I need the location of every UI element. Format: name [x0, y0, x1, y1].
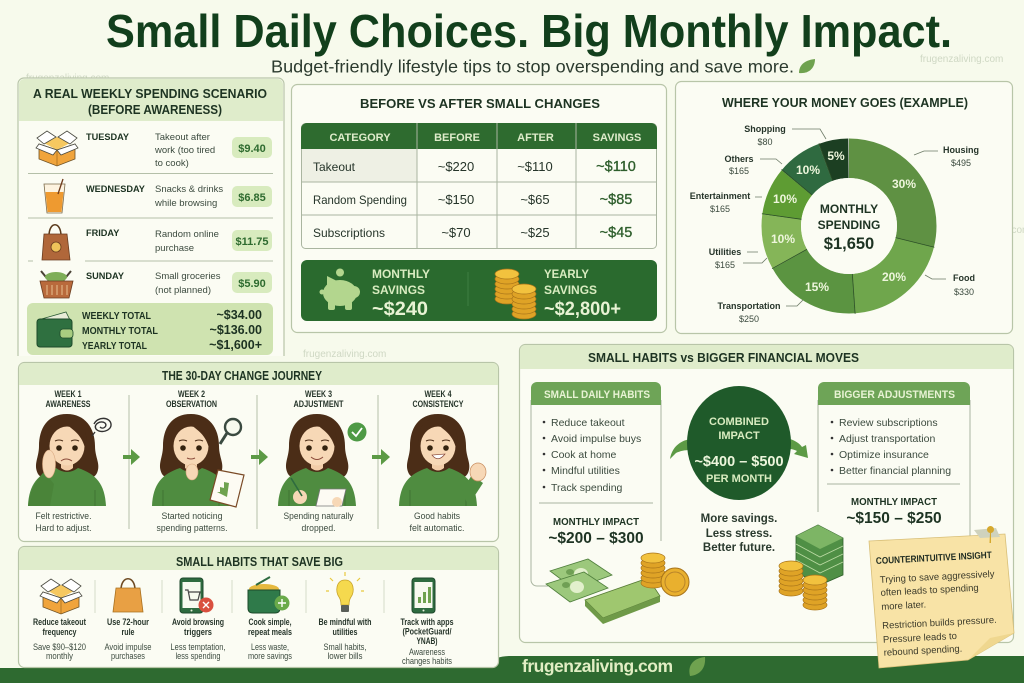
totals box: ~$136.00: [210, 323, 262, 337]
panel: where your money goes: [676, 82, 1012, 334]
card: small daily habits: MONTHLY IMPACT: [553, 517, 639, 528]
sticky note: counterintuitive insight: Trying to save aggressively: [880, 569, 995, 586]
row: Wednesday: Snacks & drinks: [155, 184, 223, 195]
row: Friday: purchase: [155, 243, 194, 254]
combined impact circle: ~$400 – $500: [694, 454, 784, 470]
savings banner: [301, 260, 657, 321]
habit: cook simple: Cook simple,: [248, 617, 292, 627]
habit: avoid browsing: less spending: [176, 651, 220, 661]
comparison table: ~$150: [438, 192, 474, 207]
habit: track with apps: changes habits: [402, 656, 452, 666]
sticky note: counterintuitive insight: more later.: [881, 599, 926, 613]
totals box: ~$1,600+: [209, 338, 262, 352]
chart labels: Shopping: [744, 124, 786, 134]
comparison table: ~$220: [438, 159, 474, 174]
habit: avoid browsing: Less temptation,: [170, 642, 226, 652]
illustration: cash and coins left: [546, 553, 689, 624]
habit: 72-hour rule: Avoid impulse: [104, 642, 152, 652]
watermarks: frugenzaliving.com: [303, 349, 386, 360]
comparison table: [301, 123, 657, 248]
sticky note: counterintuitive insight: [869, 526, 1014, 668]
row: Tuesday: [36, 131, 272, 169]
tagline: [701, 513, 777, 554]
card: small daily habits: Reduce takeout: [551, 417, 625, 429]
chart labels: $330: [954, 287, 974, 297]
sticky note: counterintuitive insight: COUNTERINTUITIVE INSIGHT: [876, 550, 992, 567]
panel: weekly spending scenario: [18, 78, 284, 356]
totals box: [27, 303, 273, 355]
habit: utilities: utilities: [332, 627, 358, 637]
week 1: [28, 389, 111, 533]
comparison table: ~$45: [600, 225, 632, 241]
donut chart: 30%: [892, 177, 916, 191]
week 4: CONSISTENCY: [412, 399, 464, 409]
chart labels: Housing: [943, 145, 979, 155]
footer site name: frugenzaliving.com: [522, 656, 673, 676]
sticky note: counterintuitive insight: Pressure leads to: [883, 631, 957, 646]
card: bigger adjustments: BIGGER ADJUSTMENTS: [834, 389, 955, 401]
combined impact circle: IMPACT: [718, 430, 760, 442]
habit: 72-hour rule: Use 72-hour: [107, 617, 149, 627]
row: Sunday: SUNDAY: [86, 271, 124, 281]
week 4: felt automatic.: [410, 523, 464, 533]
icon: green check: [348, 422, 366, 442]
panel heading: SMALL HABITS THAT SAVE BIG: [176, 554, 343, 569]
week 2: OBSERVATION: [166, 399, 217, 409]
comparison table: Takeout: [313, 160, 356, 174]
habit: cook simple: repeat meals: [248, 627, 292, 637]
week 4: Good habits: [414, 511, 460, 521]
habit: avoid browsing: triggers: [184, 627, 212, 637]
habit: track with apps: YNAB): [416, 636, 438, 646]
row: Friday: [42, 225, 272, 260]
footer bar: [0, 656, 1024, 683]
comparison table: ~$25: [520, 225, 550, 240]
panel heading: (BEFORE AWARENESS): [88, 102, 222, 117]
comparison table: SAVINGS: [593, 132, 641, 144]
row: Tuesday: work (too tired: [154, 145, 215, 156]
habit: utilities: lower bills: [328, 651, 363, 661]
donut centre label: MONTHLY: [820, 202, 878, 216]
tagline: Less stress.: [706, 528, 772, 540]
panel heading: [33, 86, 267, 117]
totals box: YEARLY TOTAL: [82, 341, 147, 352]
panel: small habits that save big: [18, 546, 498, 668]
comparison table: AFTER: [517, 132, 554, 144]
week 2: spending patterns.: [156, 523, 228, 533]
combined impact circle: PER MONTH: [706, 473, 772, 485]
card: bigger adjustments: [818, 382, 970, 545]
icon: pin: [987, 526, 994, 543]
arrows: [670, 439, 808, 459]
donut centre label: [818, 202, 880, 253]
habit: utilities: Small habits,: [324, 642, 366, 652]
icon: clipboard chart: [210, 470, 244, 507]
donut chart: 10%: [771, 232, 795, 246]
week 2: Started noticing: [162, 511, 222, 521]
habit: reduce takeout: Save $90–$120: [33, 642, 86, 652]
week 3: ADJUSTMENT: [294, 399, 344, 409]
combined impact circle: [670, 386, 808, 500]
row: Sunday: (not planned): [155, 285, 211, 296]
icon: gold coins: [495, 269, 536, 319]
subtitle: Budget-friendly lifestyle tips to stop overspending and save more.: [271, 56, 794, 76]
row: Friday: Random online: [155, 229, 219, 240]
donut chart: [762, 143, 934, 314]
chart labels: $250: [739, 314, 759, 324]
panel heading: THE 30-DAY CHANGE JOURNEY: [162, 369, 323, 383]
combined impact circle: COMBINED: [709, 416, 769, 428]
chart labels: $165: [710, 204, 730, 214]
chart labels: Others: [724, 154, 754, 164]
row: Tuesday: TUESDAY: [86, 132, 129, 142]
donut centre label: $1,650: [824, 235, 874, 253]
comparison table: ~$110: [517, 159, 553, 174]
habit: reduce takeout: frequency: [42, 627, 76, 637]
habit: track with apps: (PocketGuard/: [402, 626, 452, 636]
week 3: [278, 389, 366, 533]
habit: cook simple: [248, 577, 292, 661]
donut chart: 10%: [773, 192, 797, 206]
comparison table: ~$110: [596, 159, 636, 175]
row: Tuesday: to cook): [155, 158, 189, 169]
week 3: dropped.: [302, 523, 336, 533]
habit: reduce takeout: monthly: [46, 651, 73, 661]
row: Wednesday: while browsing: [154, 198, 217, 209]
savings banner: ~$2,800+: [544, 299, 621, 320]
card: small daily habits: Avoid impulse buys: [551, 433, 641, 445]
totals box: WEEKLY TOTAL: [82, 311, 151, 322]
week 3: Spending naturally: [284, 511, 354, 521]
panel heading: SMALL HABITS vs BIGGER FINANCIAL MOVES: [588, 350, 859, 365]
row: Sunday: [40, 271, 272, 298]
habit: 72-hour rule: [104, 579, 152, 661]
card: small daily habits: [531, 382, 661, 586]
week 1: WEEK 1: [54, 389, 82, 399]
habit: utilities: [318, 572, 372, 661]
week 1: Felt restrictive.: [36, 511, 92, 521]
icon: subtitle leaf: [799, 59, 815, 73]
savings banner: MONTHLY: [372, 267, 430, 281]
watermarks: frugenzaliving.com: [312, 85, 395, 96]
card: small daily habits: ~$200 – $300: [548, 530, 644, 547]
habit: track with apps: [400, 578, 454, 666]
habit: reduce takeout: Reduce takeout: [33, 617, 86, 627]
habit: avoid browsing: Avoid browsing: [172, 617, 224, 627]
week 4: WEEK 4: [424, 389, 452, 399]
habit: utilities: Be mindful with: [318, 617, 372, 627]
week 4: [399, 389, 486, 533]
row: Friday: FRIDAY: [86, 228, 119, 238]
chart labels: $495: [951, 158, 971, 168]
arrow: [123, 449, 140, 465]
savings banner: SAVINGS: [544, 283, 597, 297]
donut chart: 20%: [882, 270, 906, 284]
icon: wallet: [37, 312, 73, 347]
panel: small habits vs bigger moves: [520, 344, 1014, 642]
title: Small Daily Choices. Big Monthly Impact.: [106, 5, 952, 57]
savings banner: SAVINGS: [372, 283, 425, 297]
icon: scribble thought: [92, 418, 111, 436]
donut chart: 10%: [796, 163, 820, 177]
row: Wednesday: $6.85: [238, 192, 266, 204]
card: bigger adjustments: Adjust transportation: [839, 433, 935, 445]
card: bigger adjustments: Review subscriptions: [839, 417, 938, 429]
row: Tuesday: Takeout after: [155, 132, 210, 143]
habit: 72-hour rule: purchases: [111, 651, 145, 661]
watermarks: frugenzaliving.com: [920, 54, 1003, 65]
card: bigger adjustments: Optimize insurance: [839, 449, 929, 461]
card: small daily habits: Mindful utilities: [551, 465, 620, 477]
panel heading: A REAL WEEKLY SPENDING SCENARIO: [33, 86, 267, 101]
icon: magnifier: [220, 419, 241, 444]
panel: before vs after: [292, 84, 666, 332]
comparison table: CATEGORY: [329, 132, 391, 144]
comparison table: ~$70: [441, 225, 471, 240]
card: small daily habits: Track spending: [551, 482, 623, 494]
chart labels: [690, 124, 979, 324]
chart labels: Entertainment: [690, 191, 750, 201]
arrow: [251, 449, 268, 465]
chart labels: $165: [715, 260, 735, 270]
sticky note: counterintuitive insight: rebound spending.: [883, 644, 963, 659]
chart labels: $80: [757, 137, 773, 147]
donut chart: 5%: [827, 149, 845, 163]
panel heading: WHERE YOUR MONEY GOES (EXAMPLE): [722, 95, 968, 110]
habit: 72-hour rule: rule: [122, 627, 134, 637]
habit: track with apps: Track with apps: [400, 617, 454, 627]
week 1: Hard to adjust.: [36, 523, 92, 533]
icon: footer leaf: [689, 657, 705, 676]
comparison table: ~$85: [600, 192, 632, 208]
watermarks: frugenzaliving.com: [26, 73, 109, 84]
habit: cook simple: more savings: [248, 651, 292, 661]
panel: 30-day change journey: [18, 362, 498, 542]
donut chart: 15%: [805, 280, 829, 294]
comparison table: Subscriptions: [313, 226, 385, 240]
card: small daily habits: SMALL DAILY HABITS: [544, 389, 650, 401]
week 2: [152, 389, 244, 533]
comparison table: ~$65: [520, 192, 550, 207]
card: bigger adjustments: ~$150 – $250: [846, 510, 942, 527]
illustration: cash and coins right: [779, 525, 843, 610]
chart labels: Transportation: [717, 301, 781, 311]
row: Friday: $11.75: [235, 236, 269, 248]
comparison table: Random Spending: [313, 193, 407, 207]
card: small daily habits: Cook at home: [551, 449, 617, 461]
card: bigger adjustments: Better financial planning: [839, 465, 951, 477]
comparison table: BEFORE: [434, 132, 480, 144]
watermarks: frugenzaliving.com: [730, 624, 813, 635]
row: Wednesday: WEDNESDAY: [86, 184, 145, 194]
totals box: ~$34.00: [216, 308, 262, 322]
week 1: AWARENESS: [46, 399, 90, 409]
arrow: [372, 449, 390, 465]
totals box: MONTHLY TOTAL: [82, 326, 158, 337]
chart labels: $165: [729, 166, 749, 176]
row: Wednesday: [44, 179, 272, 213]
card: bigger adjustments: MONTHLY IMPACT: [851, 497, 937, 508]
row: Tuesday: $9.40: [238, 143, 266, 155]
chart labels: Food: [953, 273, 975, 283]
savings banner: YEARLY: [544, 267, 589, 281]
sticky note: counterintuitive insight: often leads to spending: [880, 583, 979, 599]
week 2: WEEK 2: [178, 389, 205, 399]
donut centre label: SPENDING: [818, 218, 880, 232]
sticky note: counterintuitive insight: Restriction builds pressure.: [882, 615, 997, 632]
habit: reduce takeout: [33, 579, 86, 661]
icon: piggy bank: [320, 268, 360, 310]
habit: track with apps: Awareness: [409, 647, 445, 657]
row: Sunday: Small groceries: [155, 271, 221, 282]
panel heading: BEFORE VS AFTER SMALL CHANGES: [360, 96, 600, 111]
chart labels: Utilities: [709, 247, 741, 257]
habit: cook simple: Less waste,: [251, 642, 289, 652]
savings banner: ~$240: [372, 299, 428, 320]
tagline: Better future.: [703, 542, 775, 554]
tagline: More savings.: [701, 513, 777, 525]
habit: avoid browsing: [170, 578, 226, 661]
row: Sunday: $5.90: [238, 278, 266, 290]
week 3: WEEK 3: [305, 389, 332, 399]
